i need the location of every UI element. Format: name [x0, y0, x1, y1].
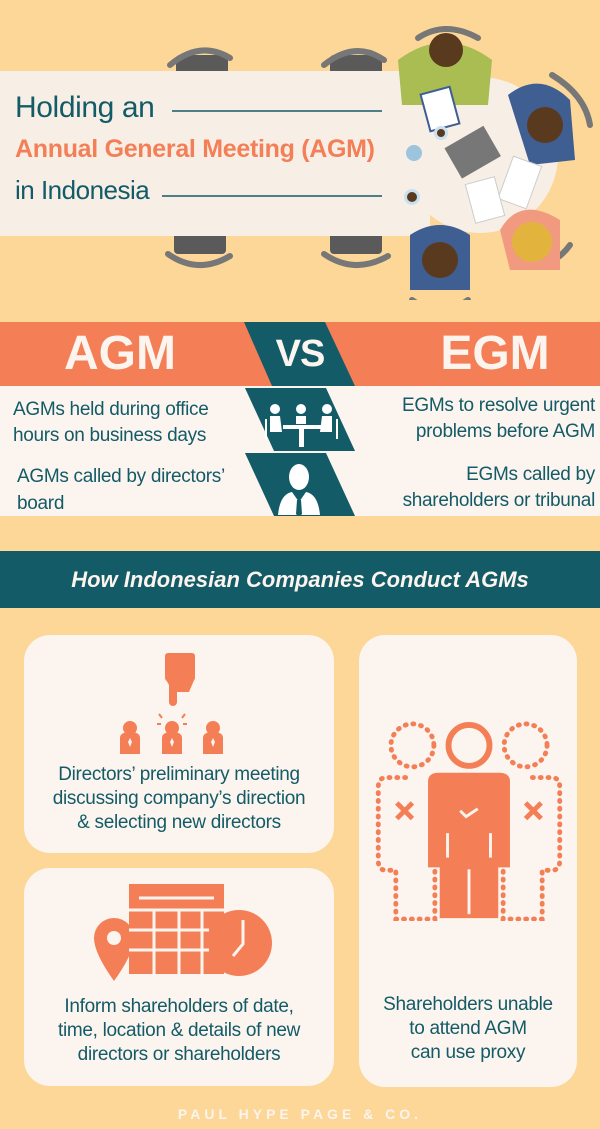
text: AGM called by directors: AGMs called by directors’ board [17, 466, 224, 514]
icon: proxy figures [376, 722, 562, 921]
title lines [172, 110, 382, 112]
section header: How Indonesian Companies Conduct AGMs [71, 567, 529, 592]
chairs [174, 55, 382, 254]
card: inform shareholders [24, 868, 334, 1086]
text: discussing company’s direction [53, 788, 305, 809]
text [383, 994, 553, 1063]
footer: PAUL HYPE PAGE & CO. [178, 1106, 422, 1122]
text: EGM called by shareholders: EGMs called by shareholders or tribunal [403, 464, 595, 511]
heading: VS: VS [276, 333, 324, 375]
text: & selecting new directors [77, 812, 281, 833]
text: Directors’ preliminary meeting [58, 764, 300, 785]
heading: EGM: EGM [440, 327, 550, 380]
comparison: AGM vs EGM [0, 322, 600, 516]
people [398, 42, 492, 105]
section header [0, 551, 600, 608]
laptop and papers [444, 126, 501, 179]
text: Shareholders unable [383, 994, 553, 1015]
header illustration: meeting table [0, 26, 593, 300]
text: directors or shareholders [78, 1044, 280, 1065]
text: AGM office hours: AGMs held during office hours on business days [13, 399, 209, 446]
title: in Indonesia [15, 175, 149, 205]
text: can use proxy [411, 1042, 525, 1063]
icon: calendar, pin, clock [94, 884, 272, 981]
title: Holding an [15, 91, 154, 124]
card: proxy [359, 635, 577, 1087]
text: EGM urgent: EGMs to resolve urgent problems before AGM [402, 395, 595, 442]
text [53, 764, 305, 833]
title [15, 91, 375, 205]
icon: businessman [278, 464, 320, 517]
heading: AGM: AGM [64, 327, 176, 380]
title: Annual General Meeting (AGM) [15, 135, 375, 163]
icon: hand pointing at directors [120, 653, 223, 754]
text: Inform shareholders of date, [64, 996, 294, 1017]
table [0, 71, 430, 236]
text [58, 996, 300, 1065]
icon: meeting table [265, 404, 338, 447]
text: time, location & details of new [58, 1020, 300, 1041]
card: directors meeting [24, 635, 334, 853]
text: to attend AGM [409, 1018, 527, 1039]
